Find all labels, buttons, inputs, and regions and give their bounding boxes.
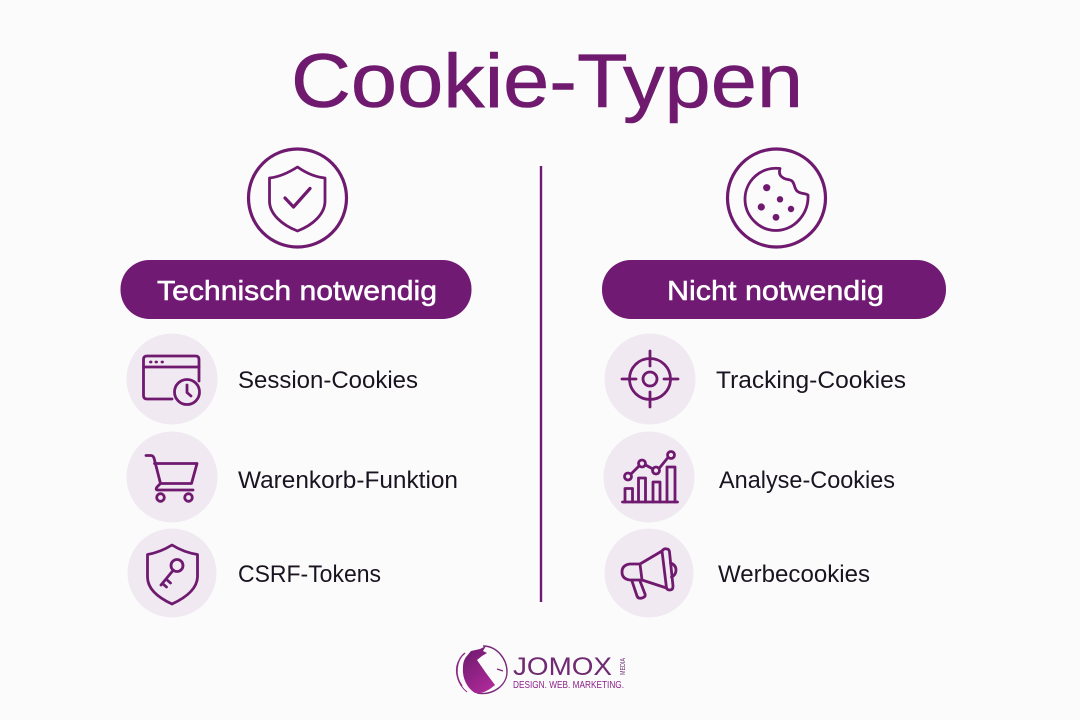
item: CSRF-Tokens — [128, 528, 381, 618]
panel: technisch notwendig — [120, 149, 472, 618]
divider — [540, 166, 542, 602]
item: Werbecookies: Werbecookies — [718, 561, 870, 588]
icon: browser window with clock — [144, 356, 200, 404]
item: Session-Cookies: Session-Cookies — [238, 367, 418, 394]
wordmark: JOMOX — [513, 653, 612, 681]
title: Cookie-Typen — [291, 39, 803, 124]
panel: nicht notwendig — [602, 149, 946, 618]
item: Tracking-Cookies — [604, 334, 906, 424]
icon: shield with key — [148, 545, 198, 604]
item: Analyse-Cookies — [604, 432, 895, 522]
icon: shield with check — [248, 149, 346, 247]
item: Tracking-Cookies: Tracking-Cookies — [716, 367, 906, 394]
logo: JOMOX Media — [456, 646, 627, 693]
item: Warenkorb-Funktion: Warenkorb-Funktion — [238, 467, 458, 494]
item: CSRF-Tokens: CSRF-Tokens — [238, 561, 381, 588]
icon: bar chart with trend line — [622, 452, 678, 502]
item: Werbecookies — [604, 528, 870, 618]
media label: MEDIA — [620, 658, 627, 675]
icon: bitten cookie — [728, 149, 826, 247]
icon: megaphone — [622, 549, 676, 598]
heading pill: Nicht notwendig: Nicht notwendig — [667, 275, 884, 306]
heading pill: Nicht notwendig — [602, 260, 946, 319]
heading pill: Technisch notwendig — [120, 260, 472, 319]
item: Warenkorb-Funktion — [126, 432, 458, 522]
tagline: DESIGN. WEB. MARKETING. — [513, 680, 624, 691]
heading pill: Technisch notwendig: Technisch notwendig — [157, 275, 437, 306]
icon: crosshair target — [622, 351, 678, 407]
item: Analyse-Cookies: Analyse-Cookies — [719, 467, 895, 494]
icon: bull logo mark — [456, 646, 507, 693]
item: Session-Cookies — [126, 334, 418, 424]
icon: shopping cart — [146, 456, 197, 501]
